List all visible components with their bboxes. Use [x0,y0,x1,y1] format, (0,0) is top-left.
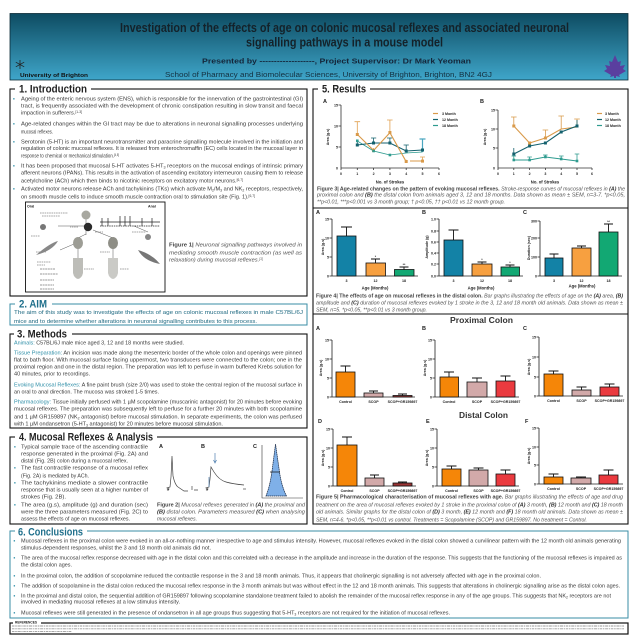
line chart 3A: proximal colon: 10 [334,124,338,128]
conclusions text: ▪ [14,539,16,545]
bar chart 5F: distal 18 month: 5 [534,464,536,468]
university logo [16,60,89,79]
bullets: introduction: acetylcholine (ACh) which then binds to nicotinic receptors on excitatory motor neurons. [21,179,230,185]
bar chart 5E: distal 12 month: E [426,419,430,425]
line chart 3B: distal colon: 15 [491,108,495,112]
bar chart 4B: amplitude: * [481,258,483,262]
bar chart 5E: distal 12 month: 5 [432,466,434,470]
bar chart 4A: area: 18 [402,279,406,283]
panel: references (microtext too small to read in the source; shown as text-texture strokes) [10,620,628,634]
bar chart 5C: proximal 18 month: SCOP [576,399,587,403]
conclusions text: the distal colon ages. [21,563,72,569]
bar chart 5E: distal 12 month: 0 [432,484,434,488]
methods text: flat to bath floor. With mucosal surface facing uppermost, two transducers were connected to the colon; one in the [14,358,302,364]
analysis bullets: ▪ [14,481,16,487]
bar chart 4B: amplitude [422,210,523,290]
bar chart 5A: proximal 3 month [316,326,417,404]
bar chart 4C: duration: ** [607,220,610,224]
bullets: introduction: receptors on the mucosal endings of intrinsic primary [166,164,303,170]
figure 5 caption: SEM, n=4-6. *p<0.05, **p<0.01 vs control. Treatments = Scopolamine (SCOP) and GR159897. No treatment = Control. [316,518,587,524]
conclusions text: 2 [566,596,568,600]
figure 5 caption: Figure 5| Pharmacological characterisation of mucosal reflexes with age. Bar graphs illustrating the effects of age and drug [316,495,623,501]
panel: 5. Results [313,82,628,524]
university logo: University of Brighton [20,73,89,79]
figure 2 caption: mucosal reflexes. [157,517,197,523]
bar chart 5D: distal 3 month [318,419,417,493]
bullets: introduction: [6,7] [249,194,255,198]
bar chart 5D: distal 3 month: 10 [326,446,330,450]
bullets: introduction: impaction in sufferers. [21,111,74,117]
panel: 2. AIM [10,298,307,325]
bar chart 5F: distal 18 month: 15 [532,426,536,430]
figure 3 caption [316,187,625,206]
heading: Results: 5. Results [322,84,366,96]
bar chart 4B: amplitude: 0.4 [431,252,436,256]
bar chart 5A: proximal 3 month: SCOP+GR159897 [388,400,417,404]
bar chart 5A: proximal 3 month: 10 [325,358,329,362]
figure 2 caption: (B) distal colon. Parameters measured (C) when analysing [157,510,305,516]
methods text [13,341,302,428]
bar chart 5B: proximal 12 month: SCOP+GR159897 [491,400,520,404]
legend 3B: 18 Month [605,124,621,128]
bar chart 5B: proximal 12 month: 0 [430,396,432,400]
bar chart 4A: area: ** [403,263,406,267]
figure 2 caption [157,503,306,523]
line chart 3B: distal colon: 10 [491,128,495,132]
bar chart 5A: proximal 3 month: 5 [327,376,329,380]
bullets: introduction: regulation of colonic mucosal reflexes. It is released from enterochromaffin (EC) cells located in the mucosal layer in [21,146,303,152]
figure 4 caption [316,294,623,314]
bullets: introduction: 3 [220,189,222,193]
bar chart 5E: distal 12 month: Control [445,489,458,493]
bar chart 4B: amplitude: 3 [452,279,454,283]
legend 3B: 12 Month [605,118,621,122]
line chart 3A: proximal colon: 4 [405,172,407,176]
conclusions text: Mucosal reflexes in the proximal colon were evoked in an all-or-nothing manner irrespective to age and stimulus intensity. However, mucosal reflexes evoked in the distal colon showed a curvilinear pattern with the 12 month old animals generating [21,539,621,545]
line chart 3A: proximal colon: 2 [373,172,375,176]
bar chart 5A: proximal 3 month: 0 [327,396,329,400]
affiliation line: School of Pharmacy and Biomolecular Sciences, University of Brighton, Brighton, BN2 4GJ [165,70,492,79]
bar chart 4A: area: 3 [346,279,348,283]
bar chart 4A: area: Age (Months) [362,286,389,290]
subheading: Distal Colon: Distal Colon [459,410,508,420]
line chart 3B: distal colon: No. of Strokes [531,180,560,184]
bar chart 4A: area: 12 [374,279,378,283]
bullets: introduction: Serotonin (5-HT) is an important neurotransmitter and paracrine signalling molecule involved in the initiation and [21,140,303,146]
bar chart 4C: duration: 100 [531,256,537,260]
methods text: and 1 µM GR159897 (NK [14,415,75,421]
bar chart 5C: proximal 18 month: Area (g.s) [527,358,531,375]
bullets: introduction: [1-3] [75,110,82,114]
figure 4 caption: Figure 4| The effects of age on mucosal reflexes in the distal colon. Bar graphs illustrating the effects of age on the (A) area, (B) [316,294,623,300]
bar chart 5A: proximal 3 month: A [316,326,320,332]
bar chart 4B: amplitude: 18 [508,279,512,283]
bar chart 5F: distal 18 month [525,419,623,491]
bullets: introduction: 2 [242,189,244,193]
methods text: Evoking Mucosal Reflexes: A fine paint brush (size 2/0) was used to stoke the central region of the mucosal surface in [14,383,302,389]
bar chart 5F: distal 18 month: 0 [534,482,536,486]
methods text: Pharmacology: Tissue initially perfused with 1 µM scopolamine (muscarinic antagonist) for 20 minutes before evoking [14,400,302,406]
analysis bullets: strokes (Fig. 2B). [21,495,66,501]
bar chart 5F: distal 18 month: Control [547,487,560,491]
bar chart 5A: proximal 3 month: Area (g.s) [319,359,323,376]
heading: Conclusions: 6. Conclusions [18,526,83,538]
bar chart 4B: amplitude: 0.2 [431,262,436,266]
figure 5 caption: old animals. Similar graphs for the distal colon of (D) 3 month, (E) 12 month and (F) 18 month old animals. Data shown as mean ± [316,510,623,516]
bar chart 5D: distal 3 month: SCOP [369,489,380,493]
bar chart 5C: proximal 18 month: SCOP+GR159897 [595,399,624,403]
bar chart 4A: area: 10 [325,236,329,240]
figure 1 caption: [1] [258,257,263,261]
methods text: Animals: C57BL/6J male mice aged 3, 12 and 18 months were studied. [14,341,184,347]
bullets: introduction: ▪ [13,140,15,146]
bar chart 5B: proximal 12 month: SCOP [472,400,483,404]
bar chart 5C: proximal 18 month: 10 [532,356,536,360]
bar chart 5C: proximal 18 month: 15 [532,336,536,340]
bar chart 5E: distal 12 month [425,419,520,493]
line chart 3A: proximal colon: No. of Strokes [376,180,405,184]
bar chart 4B: amplitude: * [509,261,511,265]
bullets: introduction: receptors, respectively, [244,187,304,193]
line chart 3B: distal colon: 1 [513,172,515,176]
analysis bullets: response generated in the proximal (Fig. 2A) and [21,452,148,458]
bar chart 4C: duration [523,210,622,288]
bar chart 4B: amplitude: Age (Months) [468,286,495,290]
aim text: mice and to determine whether alterations in neuronal signalling contributes to this process. [14,319,257,325]
bullets: introduction: Age-related changes within the GI tract may be due to alterations in neuronal signalling processes underlying [21,122,303,128]
panel: 1. Introduction [10,82,307,296]
bar chart 5B: proximal 12 month: Control [443,400,455,404]
heading: Methods: 3. Methods [17,328,67,340]
aim text: The aim of this study was to investigate the effects of age on colonic mucosal reflexes in male C57BL/6J [14,310,303,316]
legend 3A [433,112,458,128]
figure 3 caption: Figure 3| Age-related changes on the pattern of evoking mucosal reflexes. Stroke-response curves of mucosal reflexes in (A) the [317,187,625,193]
bar chart 5B: proximal 12 month: B [422,326,426,332]
bullets: introduction: response to chemical or mechanical stimulation. [21,154,136,160]
bullets: introduction: /M [214,187,221,193]
methods text: antagonist) for 20 minutes before mucosal stimulation. [88,422,223,428]
figure 2B trace with arrow [206,453,246,490]
bar chart 4A: area: * [375,255,377,259]
conclusions text: Mucosal reflexes were still generated in the presence of ondansetron in all age groups thus suggesting that 5-HT [21,611,290,617]
bar chart 5E: distal 12 month: 15 [430,428,434,432]
bar chart 4A: area: A [316,210,320,216]
bar chart 5D: distal 3 month: 15 [326,428,330,432]
bullets: introduction: ▪ [13,164,15,170]
bullets: introduction: 2 [212,189,214,193]
bar chart 4A: area: 0 [327,274,329,278]
heading: AIM: 2. AIM [19,298,47,310]
bullets: introduction: [4,5] [114,153,119,157]
presenter line: Presented by -------------------, Project Supervisor: Dr Mark Yeoman [202,56,471,66]
figure 1 caption [169,243,302,264]
bullets: introduction [13,97,304,201]
bullets: introduction: Ageing of the enteric nervous system (ENS), which is responsible for the innervation of the gastrointestinal (GI) [21,97,303,103]
figure 1 caption: mediating smooth muscle contraction (as well as [169,251,302,257]
bullets: introduction: [6,7] [237,178,243,182]
figure 4 caption: amplitude and (C) duration of mucosal reflexes evoked by 1 stroke in the 3, 12 and 18 month old animals. Data shown as mean ± [316,301,623,307]
line chart 3A: proximal colon: 3 [389,172,391,176]
bar chart 5B: proximal 12 month: Area (g.s) [423,359,427,376]
analysis bullets: assess the effects of age on mucosal reflexes. [21,517,130,523]
bar chart 5C: proximal 18 month: Control [547,399,560,403]
bar chart 4B: amplitude: B [422,210,426,216]
header banner [10,14,628,80]
analysis bullets: The fast contractile response of a mucosal reflex [21,466,148,472]
panel: references (microtext too small to read in the source; shown as text-texture strokes): REFERENCES [15,621,38,625]
line chart 3B: distal colon: 2 [529,172,531,176]
title [120,20,569,50]
figure 5 caption: treatment on the area of mucosal reflexes evoked by 1 stroke in the proximal colon of (A) 3 month, (B) 12 month and (C) 18 month [316,503,623,509]
bar chart 5F: distal 18 month: F [525,419,529,425]
title: signalling pathways in a mouse model [246,34,443,50]
line chart 3A: proximal colon [323,99,458,184]
bar chart 4A: area: 5 [327,256,329,260]
analysis bullets: ▪ [14,503,16,509]
methods text: Tissue Preparation: An incision was made along the mesenteric border of the whole colon and openings were pinned [14,351,302,357]
bar chart 4C: duration: 3 [553,279,555,283]
conclusions text: In the proximal and distal colon, the sequential addition of GR159897 following scopolamine standalone treatment failed to abolish the remainder of the mucosal reflex response in any of the age groups. This suggests that NK [21,594,556,600]
heading: Introduction: 1. Introduction [19,84,87,96]
conclusions text: stimulus-dependent responses, whilst the 3 and 18 month old animals did not. [21,546,211,552]
legend 3A: 18 Month [442,124,458,128]
bar chart 4C: duration: 18 [606,279,610,283]
analysis bullets: ▪ [14,445,16,451]
bar chart 4B: amplitude: 0.6 [431,240,436,244]
figure 2 caption: Figure 2| Mucosal reflexes generated in (A) the proximal and [157,503,306,509]
bar chart 5D: distal 3 month: SCOP+GR159897 [388,489,417,493]
bar chart 4C: duration: 300 [531,220,537,224]
figure 5 caption [316,495,623,524]
line chart 3A: proximal colon: 1 [356,172,358,176]
bar chart 5D: distal 3 month: 0 [328,484,330,488]
figure 3 caption: proximal colon and (B) the distal colon from animals aged 3, 12 and 18 months. Data shown as mean ± SEM, n=3-7. *p<0.05, [316,193,625,199]
figure 1 caption: Figure 1| Neuronal signalling pathways involved in [169,243,302,249]
figure 2 panel letters: B [201,444,205,450]
bar chart 5F: distal 18 month: SCOP [576,487,587,491]
conclusions text: ▪ [14,611,16,617]
bar chart 5D: distal 3 month: 5 [328,466,330,470]
legend 3B [597,112,621,128]
bar chart 4C: duration: Duration (sec) [527,235,531,260]
bar chart 4B: amplitude: 12 [480,279,484,283]
analysis bullets: (Fig. 2A) is mediated by ACh. [21,474,89,480]
bar chart 5C: proximal 18 month: C [523,326,527,332]
bar chart 5F: distal 18 month: SCOP+GR159897 [594,487,623,491]
line chart 3A: proximal colon: 5 [336,146,338,150]
bar chart 4C: duration: Age (Months) [569,284,596,288]
figure 2 panel letters: C [253,444,257,450]
bullets: introduction: ▪ [13,187,15,193]
icon: purple maple leaf [604,55,626,78]
bar chart 5B: proximal 12 month: 15 [428,338,432,342]
bar chart 4A: area: Area (g.s) [321,238,325,255]
figure 3 caption: **p<0.01, ***p<0.001 vs 3 month group; † p<0.05, †† p<0.01 vs 12 month group. [317,200,505,206]
bar chart 4B: amplitude: 0.8 [431,230,436,234]
bullets: introduction: tract, is frequently associated with the development of chronic constipation resulting in slow transit and faecal [21,104,303,110]
conclusions text: ▪ [14,594,16,600]
bar chart 5A: proximal 3 month: Control [339,400,352,404]
conclusions text: receptors are not required for the initiation of mucosal reflexes. [296,611,450,617]
bullets: introduction: ▪ [13,122,15,128]
bullets: introduction: and NK [222,187,243,193]
figure 2 panel letters [159,444,257,450]
conclusions text: The addition of scopolamine in the distal colon reduced the mucosal reflex response in the 3 month animals but was without effect in the 12 and 18 month animals. This suggests that alterations in cholinergic signalling arise as the distal colon ages. [21,584,620,590]
analysis bullets: response that is usually seen at a higher number of [21,488,149,494]
bar chart 5D: distal 3 month: Control [341,489,353,493]
bar chart 5E: distal 12 month: 10 [430,446,434,450]
methods text: 40 minutes, prior to recordings. [14,372,90,378]
methods text: proximal region and one in the distal region. The preparation was left to perfuse in warm buffered Krebs solution for [14,365,302,371]
figure 2A trace [167,456,198,491]
methods text: 3 [86,424,88,428]
line chart 3A: proximal colon: 15 [334,104,338,108]
bar chart 4A: area [316,210,418,290]
bar chart 5E: distal 12 month: SCOP [473,489,484,493]
figure 1: neuronal pathway diagram: Oral [27,204,34,208]
figure 4 caption: SEM, n=5. *p<0.05, **p<0.01 vs 3 month group. [316,308,427,314]
bar chart 5A: proximal 3 month: 15 [325,338,329,342]
analysis bullets: ▪ [14,466,16,472]
figure 2 panel letters: A [159,444,163,450]
methods text: an oral to anal direction. The mucosa was stroked 1-5 times. [14,390,159,396]
conclusions text: The area of the mucosal reflex response decreased with age in the distal colon and this correlated with a decrease in the amplitude and increase in the duration of the response. This suggests that the functioning of the mucosal reflexes is impaired as [21,556,622,562]
figure 1: neuronal pathway diagram [26,202,165,292]
bullets: introduction: mucosal reflexes. [21,130,53,136]
bar chart 4C: duration: C [523,210,527,216]
analysis bullets: Typical sample trace of the ascending contractile [21,445,148,451]
figure 2C measured peak [262,444,303,498]
legend 3A: 12 Month [442,118,458,122]
bar chart 4B: amplitude: 1.0 [431,218,436,222]
line chart 3B: distal colon: 0 [493,166,495,170]
line chart 3B: distal colon: 4 [560,172,562,176]
line chart 3B: distal colon [480,99,621,184]
bar chart 5C: proximal 18 month: 5 [534,376,536,380]
line chart 3B: distal colon: 3 [544,172,546,176]
line chart 3B: distal colon: Area (g.s) [483,128,487,145]
conclusions text: ▪ [14,574,16,580]
bar chart 5D: distal 3 month: Area (g.s) [321,449,325,466]
conclusions text: ▪ [14,556,16,562]
conclusions text: receptors are not [568,594,612,600]
bar chart 5D: distal 3 month: D [318,419,322,425]
panel: 3. Methods [10,327,307,428]
legend 3A: 3 Month [442,112,456,116]
bullets: introduction: 3 [164,166,166,170]
line chart 3A: proximal colon: 6 [438,172,440,176]
bullets: introduction: It has been proposed that mucosal 5-HT activates 5-HT [21,164,153,170]
line chart 3B: distal colon: B [480,99,484,105]
bar chart 5F: distal 18 month: Area (g.s) [527,447,531,464]
methods text: with 1 µM ondansetron (5-HT [14,422,84,428]
bar chart 5C: proximal 18 month [523,326,624,403]
bullets: introduction: on smooth muscle cells to induce smooth muscle contraction oral to stimulation site (Fig. 1). [21,195,240,201]
bar chart 4A: area: 15 [325,218,329,222]
bar chart 5B: proximal 12 month [422,326,520,404]
bullets: introduction: Activated motor neurons release ACh and tachykinins (TKs) which activate M [21,187,205,193]
methods text: mucosal reflexes. The preparation was subsequently left to perfuse for a further 20 minutes with both scopolamine [14,407,302,413]
bar chart 5C: proximal 18 month: 0 [534,394,536,398]
bar chart 5B: proximal 12 month: 10 [428,358,432,362]
conclusions text: In the proximal colon, the addition of scopolamine reduced the contractile response in the 3 and 18 month animals. Thus, it appears that cholinergic signalling is not adversely affected with age in the proximal colon. [21,574,541,580]
heading: Mucosal Reflexes & Analysis: 4. Mucosal Reflexes & Analysis [19,432,153,444]
bar chart 5E: distal 12 month: Area (g.s) [425,449,429,466]
line chart 3A: proximal colon: 0 [340,172,342,176]
conclusions text: ▪ [14,584,16,590]
methods text: antagonist) before mucosal stimulation. In separate experiments, the colon was perfused [80,415,302,421]
line chart 3B: distal colon: 6 [591,172,593,176]
panel: 6. Conclusions [10,525,628,618]
line chart 3B: distal colon: 5 [576,172,578,176]
bar chart 5E: distal 12 month: SCOP+GR159897 [491,489,520,493]
bar chart 5F: distal 18 month: 10 [532,446,536,450]
analysis bullets [14,445,149,523]
conclusions text: involved in mediating mucosal reflexes at a low stimulus intensity. [21,600,180,606]
bar chart 4C: duration: 200 [531,236,537,240]
analysis bullets: The tachykinins mediate a slower contractile [21,481,148,487]
line chart 3B: distal colon: 0 [497,172,499,176]
line chart 3A: proximal colon: 0 [336,166,338,170]
panel: 4. Mucosal Reflexes & Analysis [10,430,307,524]
analysis bullets: distal (Fig. 2B) colon during a mucosal reflex. [21,459,128,465]
legend 3B: 3 Month [605,112,619,116]
line chart 3A: proximal colon: Area (g.s) [326,128,330,145]
figure 1 caption: relaxation) during mucosal reflexes. [169,258,254,264]
bar chart 5B: proximal 12 month: 5 [430,376,432,380]
bar chart 4C: duration: 0 [535,274,537,278]
bar chart 4B: amplitude: 0.0 [431,274,436,278]
line chart 3A: proximal colon: 5 [422,172,424,176]
bar chart 4C: duration: 12 [580,279,584,283]
line chart 3A: proximal colon: A [323,99,327,105]
conclusions text: 3 [294,613,296,617]
bullets: introduction: ▪ [13,97,15,103]
bullets: introduction: afferent neurons (IPANs). This results in the activation of ascending excitatory interneuron causing them to release [21,171,303,177]
aim text [14,310,303,325]
bar chart 5A: proximal 3 month: SCOP [368,400,379,404]
bar chart 4B: amplitude: Amplitude (g) [425,235,429,259]
analysis bullets: The area (g.s), amplitude (g) and duration (sec) [21,503,148,509]
figure 1: neuronal pathway diagram: Anal [148,204,156,208]
line chart 3B: distal colon: 5 [493,146,495,150]
conclusions text [14,539,622,617]
subheading: Proximal Colon: Proximal Colon [450,315,513,325]
analysis bullets: were the three parameters measured (Fig. 2C) to [20,510,148,516]
methods text: 2 [78,417,80,421]
